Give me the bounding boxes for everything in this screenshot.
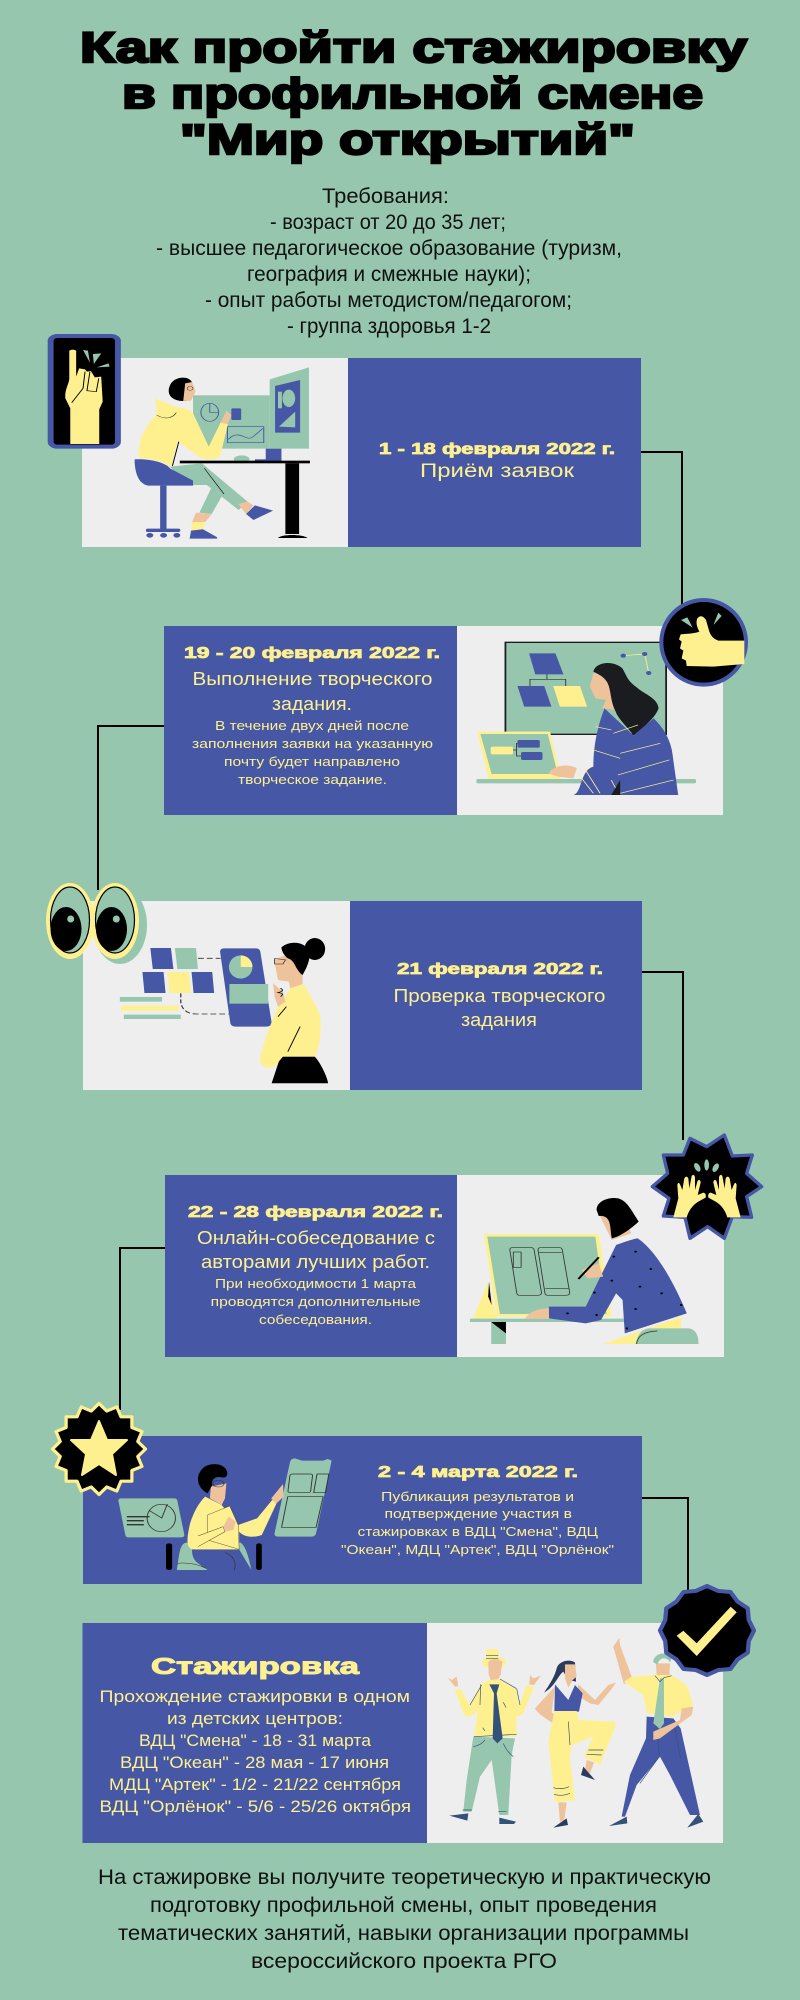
dates list: ВДЦ "Смена" - 18 - 31 марта <box>139 1731 372 1750</box>
connector 1 <box>641 452 682 605</box>
connector 5 <box>642 1498 688 1590</box>
requirements text: - опыт работы методистом/педагогом; <box>205 289 572 312</box>
requirements text: география и смежные науки); <box>247 263 531 286</box>
dates list <box>100 1687 411 1816</box>
step name: Выполнение творческого <box>192 669 432 689</box>
date: 21 февраля 2022 г. <box>397 961 603 978</box>
date: 22 - 28 февраля 2022 г. <box>188 1204 443 1221</box>
step description: почту будет направлено <box>224 754 400 769</box>
step description: творческое задание. <box>238 772 387 787</box>
requirements text <box>156 185 622 338</box>
illustration: person with phone screen <box>118 1458 332 1570</box>
step name <box>394 986 606 1030</box>
footer text: всероссийского проекта РГО <box>251 1950 557 1973</box>
icon: eyes <box>46 883 147 964</box>
panel: step 3 review <box>83 901 642 1090</box>
date: 1 - 18 февраля 2022 г. <box>379 441 615 458</box>
title: Как пройти стажировку <box>80 24 747 72</box>
footer text: подготовку профильной смены, опыт проведения <box>150 1894 657 1917</box>
step description: собеседования. <box>259 1312 372 1327</box>
step description: Публикация результатов и <box>381 1489 574 1504</box>
connector 2 <box>98 726 164 890</box>
step description <box>192 718 433 787</box>
step description: стажировках в ВДЦ "Смена", ВДЦ <box>358 1524 598 1539</box>
requirements text: - высшее педагогическое образование (туризм, <box>156 237 622 260</box>
illustration: three people <box>447 1638 703 1828</box>
panel: step 5 results <box>83 1436 642 1584</box>
connector 4 <box>120 1248 165 1410</box>
step description: При необходимости 1 марта <box>215 1276 417 1291</box>
illustration: person at desk <box>135 367 310 539</box>
icon: thumbs up <box>661 600 746 685</box>
dates list: МДЦ "Артек" - 1/2 - 21/22 сентября <box>109 1775 401 1794</box>
step name: авторами лучших работ. <box>201 1252 430 1272</box>
step description: подтверждение участия в <box>384 1506 572 1521</box>
step name: Приём заявок <box>420 461 575 482</box>
dates list: из детских центров: <box>167 1709 343 1728</box>
requirements text: - группа здоровья 1-2 <box>287 315 491 338</box>
panel: internship <box>82 1623 723 1843</box>
dates list: Прохождение стажировки в одном <box>100 1687 410 1706</box>
icon: check badge <box>660 1586 754 1675</box>
requirements text: Требования: <box>322 185 449 208</box>
icon: pointing finger <box>51 336 118 447</box>
illustration: woman with tablet <box>120 938 328 1083</box>
title <box>80 24 747 164</box>
step name <box>192 669 432 714</box>
illustration: woman drawing on tablet <box>470 1198 699 1344</box>
title: "Мир открытий" <box>180 116 635 164</box>
footer text <box>98 1866 711 1973</box>
panel: step 2 creative task <box>164 626 723 815</box>
illustration: woman at board <box>476 642 696 797</box>
panel: step 4 interview <box>165 1175 724 1357</box>
step name: Проверка творческого <box>394 986 606 1006</box>
panel: step 1 application <box>82 358 641 547</box>
step description: проводятся дополнительные <box>211 1294 421 1309</box>
step name <box>197 1228 435 1272</box>
footer text: На стажировке вы получите теоретическую и практическую <box>98 1866 711 1889</box>
title: в профильной смене <box>122 70 703 118</box>
date: 19 - 20 февраля 2022 г. <box>184 645 440 662</box>
step description: В течение двух дней после <box>215 718 409 733</box>
requirements text: - возраст от 20 до 35 лет; <box>270 211 506 234</box>
step description <box>341 1489 614 1557</box>
dates list: ВДЦ "Океан" - 28 мая - 17 июня <box>120 1753 389 1772</box>
step name: задания <box>461 1010 537 1030</box>
step description: "Океан", МДЦ "Артек", ВДЦ "Орлёнок" <box>341 1542 614 1557</box>
heading: Стажировка <box>151 1653 359 1679</box>
icon: star badge <box>52 1404 146 1494</box>
step description: заполнения заявки на указанную <box>192 736 433 751</box>
connector 3 <box>642 972 683 1140</box>
footer text: тематических занятий, навыки организации программы <box>118 1922 689 1945</box>
step description <box>211 1276 421 1327</box>
step name: Онлайн-собеседование с <box>197 1228 435 1248</box>
dates list: ВДЦ "Орлёнок" - 5/6 - 25/26 октября <box>100 1797 411 1816</box>
date: 2 - 4 марта 2022 г. <box>378 1464 578 1481</box>
step name: задания. <box>272 694 352 714</box>
icon: clapping hands <box>652 1135 762 1238</box>
